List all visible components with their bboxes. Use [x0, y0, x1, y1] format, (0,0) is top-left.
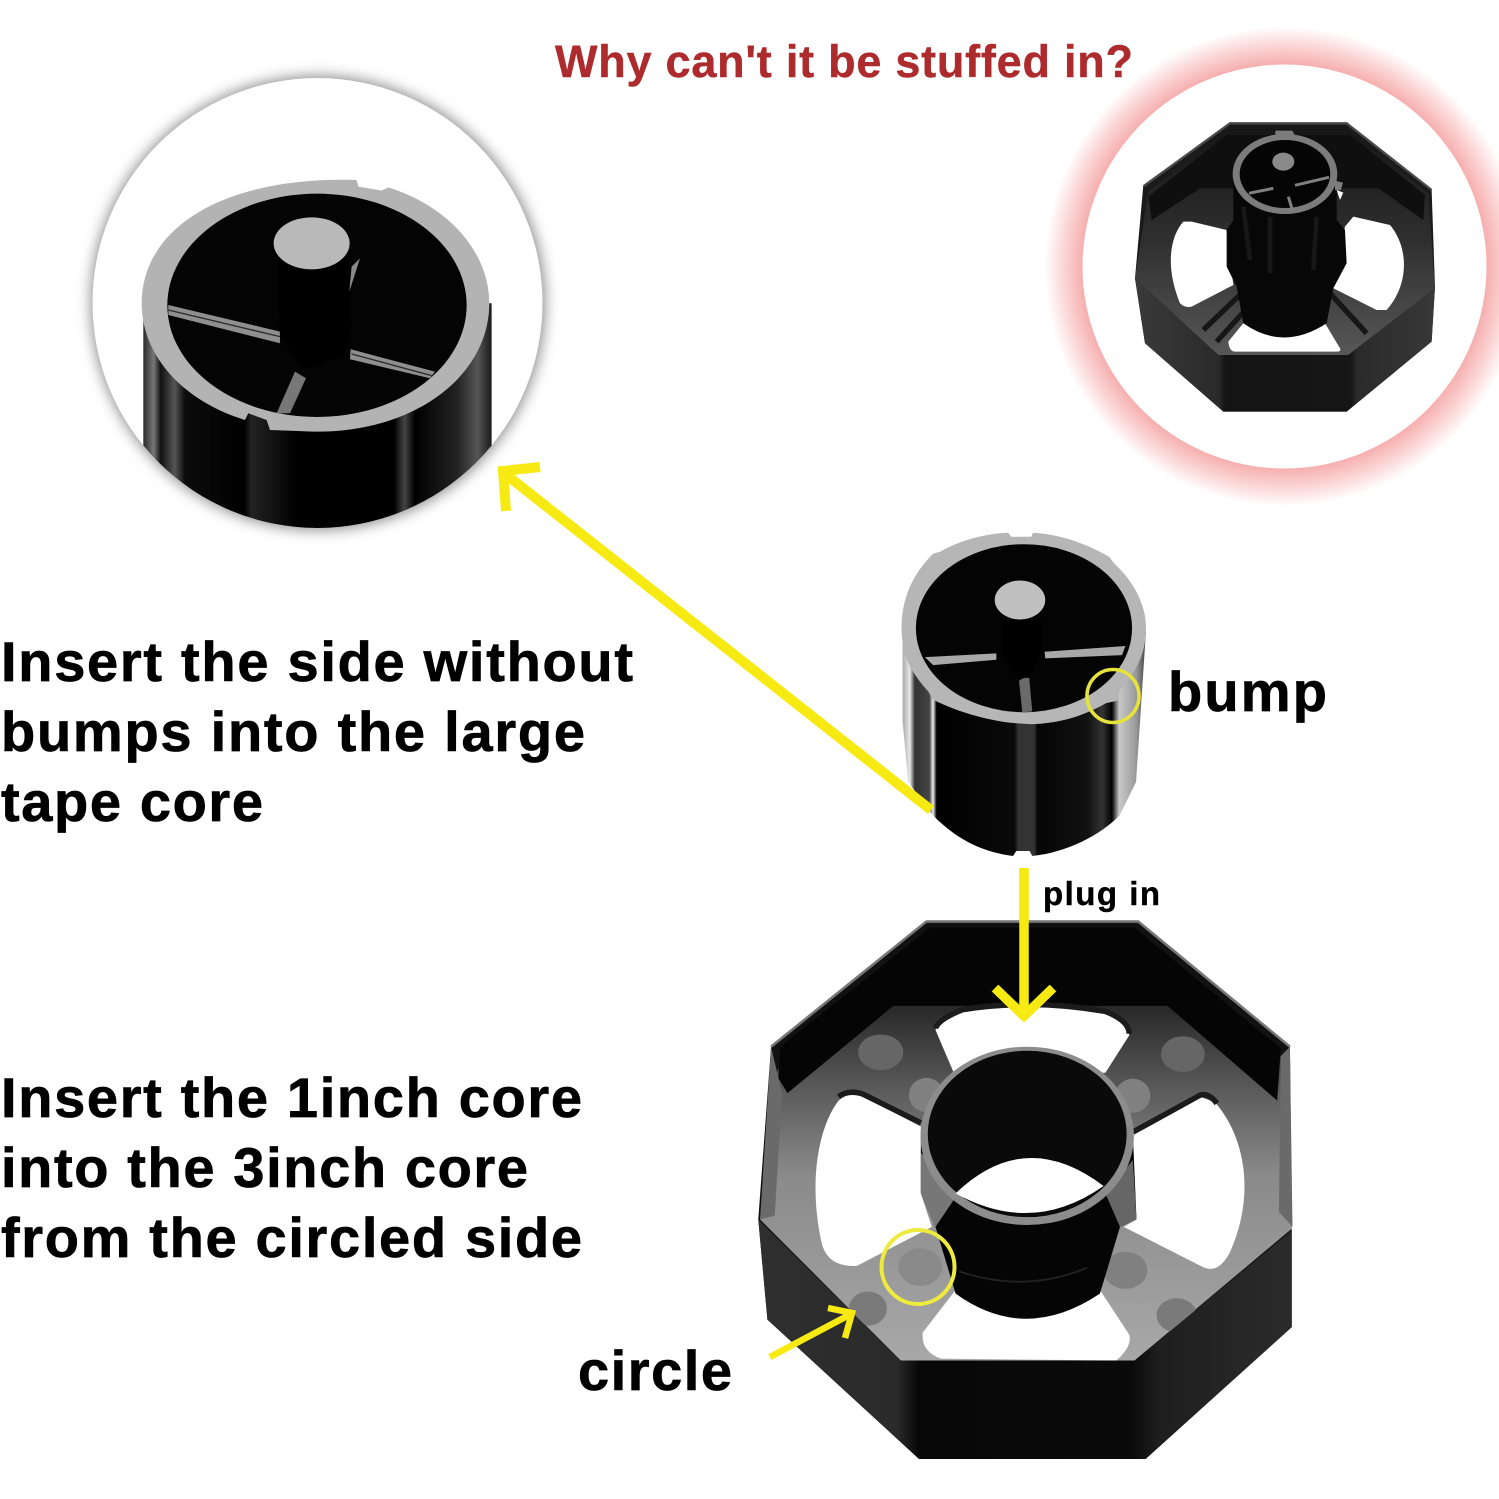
circular pads: [849, 1034, 1205, 1332]
arrow: small arrow to circle: [770, 1308, 852, 1357]
text block: insert the 1 inch core: into the 3inch core: [1, 1136, 528, 1199]
panel: top-left zoomed view of core end without bumps: [91, 76, 545, 537]
pink halo ring: [1044, 26, 1499, 506]
text block: insert the side without bumps: [1, 630, 633, 833]
white disc: [92, 78, 542, 528]
tube interior: [928, 1051, 1127, 1217]
title: Why can't it be stuffed in?: [555, 36, 1133, 87]
white inner disc: [1082, 64, 1486, 468]
text block: insert the 1 inch core: Insert the 1inch core: [1, 1066, 582, 1129]
label: circle: circle: [578, 1339, 732, 1402]
text block: insert the side without bumps: bumps into the large: [1, 700, 585, 763]
window holes: [935, 1006, 1129, 1073]
icon: yellow circle marking bump: [1087, 670, 1139, 722]
text block: insert the 1 inch core: from the circled side: [1, 1206, 582, 1269]
panel: large octagonal 3 inch adapter: [758, 922, 1292, 1459]
tube see-through opening: [956, 1158, 1104, 1213]
label: plug in: plug in: [1043, 875, 1160, 912]
outer silhouette: [758, 922, 1292, 1459]
icon: assembled adapter in small octagon: [1135, 123, 1435, 412]
icon: yellow circle marking pad: [882, 1230, 954, 1304]
tube rim: [921, 1047, 1134, 1225]
inner floor: [760, 948, 1292, 1361]
rear wall: [778, 928, 1281, 1101]
central tube: [921, 1134, 1136, 1319]
arrow: long yellow arrow to zoomed view: [503, 467, 931, 810]
text block: insert the side without bumps: tape core: [1, 770, 263, 833]
label: bump: bump: [1168, 660, 1327, 723]
arrow: plug-in down arrow: [995, 868, 1053, 1016]
text block: insert the side without bumps: Insert the side without: [1, 630, 633, 693]
icon: 1 inch core with bumps: [902, 533, 1146, 856]
front wall: [758, 1219, 1292, 1459]
text block: insert the 1 inch core: [1, 1066, 582, 1269]
icon: enlarged core end: [142, 180, 492, 537]
grey shadow behind disc: [91, 76, 545, 530]
panel: top-right pink glow circle with assembled core: [1044, 26, 1499, 506]
